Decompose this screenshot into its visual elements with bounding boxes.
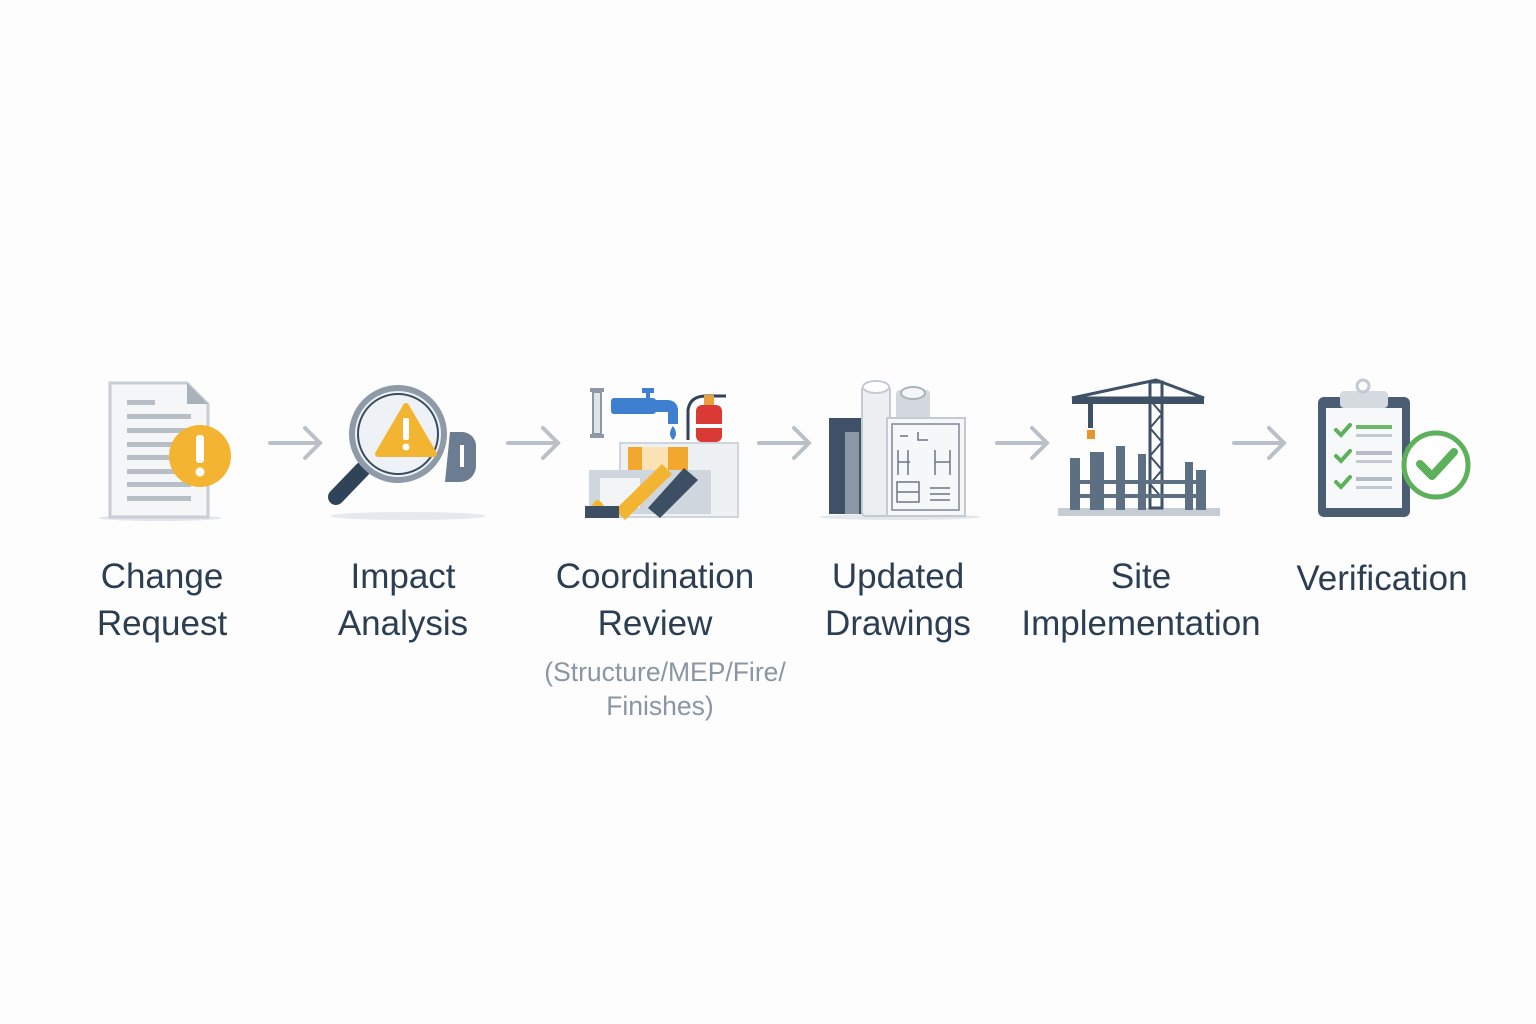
arrow 1 [270,428,320,458]
label: Updated Drawings: Updated [832,557,964,596]
label: Verification: Verification [1296,559,1468,598]
label: Change Request: Request [97,604,227,643]
icon: impact analysis magnifier [330,388,486,520]
label: Site Implementation [1021,557,1261,643]
label: Coordination Review: Coordination [556,557,754,596]
subtitle: Structure/MEP/Fire/Finishes: (Structure/MEP/Fire/ [544,657,786,687]
label: Impact Analysis: Impact [350,557,456,596]
icon: coordination review [585,388,738,520]
arrow 4 [997,428,1047,458]
arrow 5 [1234,428,1284,458]
label: Updated Drawings: Drawings [825,604,971,643]
label: Change Request: Change [101,557,223,596]
icon: updated drawings [820,381,980,520]
subtitle: Structure/MEP/Fire/Finishes: Finishes) [606,691,714,721]
label: Change Request [97,557,227,643]
label: Impact Analysis: Analysis [338,604,468,643]
subtitle: Structure/MEP/Fire/Finishes [544,657,786,721]
label: Updated Drawings [825,557,971,643]
label: Impact Analysis [338,557,468,643]
icon: change request document [98,383,231,521]
arrow 3 [759,428,809,458]
icon: site implementation crane [1058,380,1220,516]
label: Coordination Review [556,557,754,643]
arrow 2 [508,428,558,458]
label: Site Implementation: Implementation [1021,604,1261,643]
label: Site Implementation: Site [1111,557,1171,596]
icon: verification clipboard [1318,380,1468,517]
label: Coordination Review: Review [598,604,713,643]
